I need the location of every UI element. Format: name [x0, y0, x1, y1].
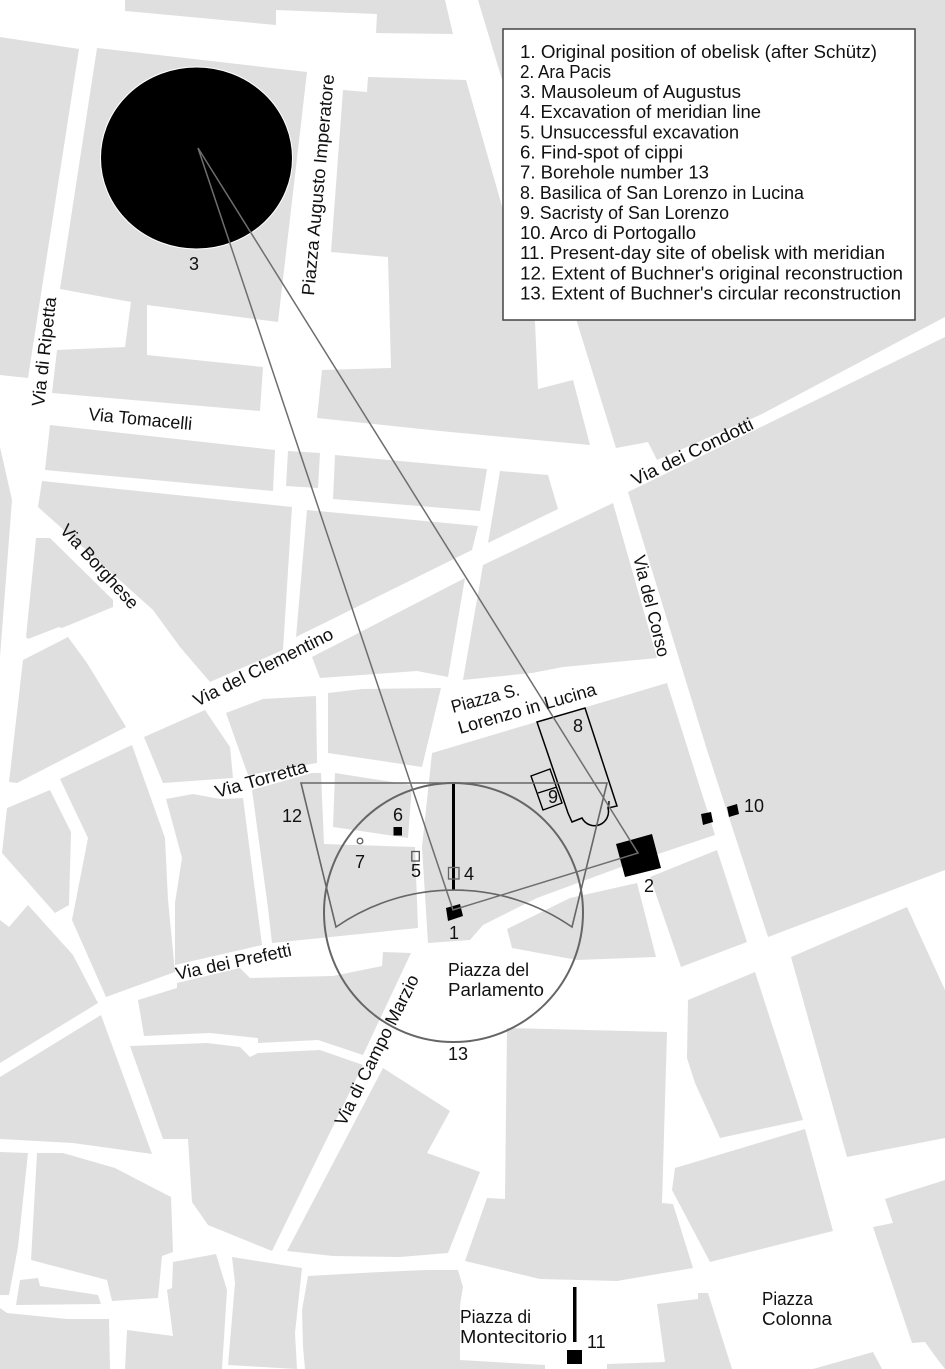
street name labels: Via dei Condotti: [628, 414, 757, 490]
meridian line: [452, 783, 455, 890]
street name labels: Via Torretta: [213, 756, 310, 802]
apse arc of the basilica: [608, 801, 609, 808]
street name labels: Via Borghese: [56, 520, 143, 613]
icon: Ara Pacis: [616, 834, 661, 877]
map numbers: 2: [644, 876, 654, 896]
legend panel: 9. Sacristy of San Lorenzo: [520, 203, 729, 223]
legend panel: 11. Present-day site of obelisk with meridian: [520, 243, 885, 263]
street name labels: Via di Ripetta: [28, 295, 60, 407]
sight-line triangle: [198, 148, 638, 910]
street name labels: Montecitorio: [460, 1327, 567, 1347]
street name labels: Piazza del: [448, 960, 529, 980]
Buchner's original reconstruction: [301, 783, 607, 927]
icon: Mausoleum of Augustus: [100, 67, 292, 249]
legend panel: [503, 29, 915, 320]
find-spot square 6: [394, 827, 402, 836]
street name labels: Via Tomacelli: [88, 404, 193, 434]
map numbers: 6: [393, 805, 403, 825]
legend panel: 4. Excavation of meridian line: [520, 102, 761, 122]
map numbers: 10: [744, 796, 764, 816]
legend panel: 5. Unsuccessful excavation: [520, 122, 739, 142]
map numbers: 1: [449, 923, 459, 943]
Sacristy of San Lorenzo: [531, 769, 562, 810]
Basilica of San Lorenzo: [537, 708, 617, 826]
map numbers: 4: [464, 864, 474, 884]
map numbers: [282, 716, 764, 1352]
legend panel: 6. Find-spot of cippi: [520, 142, 683, 162]
legend panel: 12. Extent of Buchner's original reconstruction: [520, 264, 903, 284]
legend panel: 3. Mausoleum of Augustus: [520, 82, 741, 102]
label: 3: 3: [189, 254, 199, 274]
street name labels: [28, 73, 833, 1347]
street name labels: Via dei Prefetti: [174, 940, 293, 984]
map numbers: 5: [411, 861, 421, 881]
borehole 7: [357, 838, 363, 844]
street name labels: Via del Corso: [629, 553, 674, 659]
icon: present-day obelisk with meridian: [567, 1287, 582, 1364]
map numbers: 7: [355, 852, 365, 872]
street name labels: Via di Campo Marzio: [331, 971, 423, 1129]
legend panel: 2. Ara Pacis: [520, 62, 611, 82]
map numbers: 13: [448, 1044, 468, 1064]
legend panel: 7. Borehole number 13: [520, 162, 709, 182]
map numbers: 8: [573, 716, 583, 736]
legend panel: 1. Original position of obelisk (after Schütz): [520, 42, 877, 62]
street name labels: Via del Clementino: [190, 624, 336, 711]
street name labels: Piazza di: [460, 1307, 531, 1327]
map numbers: 12: [282, 806, 302, 826]
map numbers: 9: [548, 787, 558, 807]
icon: original position of obelisk: [446, 904, 463, 921]
map numbers: 11: [587, 1332, 606, 1352]
excavation square 5: [412, 852, 419, 861]
street name labels: Piazza Augusto Imperatore: [298, 73, 338, 296]
street name labels: Lorenzo in Lucina: [456, 679, 600, 738]
street name labels: Parlamento: [448, 980, 544, 1000]
street name labels: Piazza: [762, 1289, 814, 1309]
legend panel: 13. Extent of Buchner's circular reconstruction: [520, 284, 901, 304]
street name labels: Colonna: [762, 1309, 833, 1329]
Buchner's circular reconstruction: [324, 783, 583, 1042]
excavation square 4: [448, 868, 459, 879]
street name labels: Piazza S.: [449, 679, 522, 717]
legend panel: 8. Basilica of San Lorenzo in Lucina: [520, 183, 805, 203]
legend panel: 10. Arco di Portogallo: [520, 223, 696, 243]
icon: Arco di Portogallo squares: [701, 804, 739, 825]
